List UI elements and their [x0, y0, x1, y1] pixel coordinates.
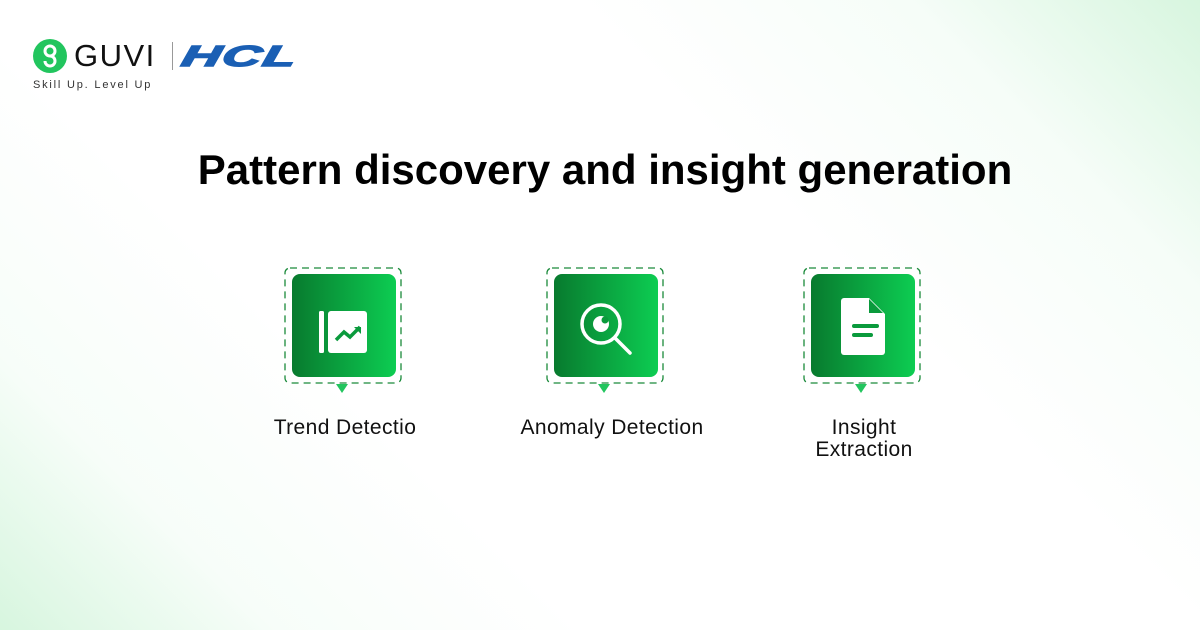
label: anomaly: Anomaly Detection — [520, 416, 704, 439]
label: insight — [815, 416, 913, 461]
card: anomaly detection — [546, 267, 664, 393]
title: Pattern discovery and insight generation — [198, 146, 1012, 193]
card: trend detection — [284, 267, 402, 393]
tagline: Skill Up. Level Up — [33, 79, 152, 91]
card: insight extraction — [803, 267, 921, 393]
icon: guvi — [33, 39, 67, 73]
hcl wordmark: HCL — [179, 41, 301, 73]
guvi wordmark: GUVI — [74, 38, 156, 73]
label: trend: Trend Detectio — [274, 416, 416, 439]
label: insight: Insight — [832, 416, 896, 439]
logo — [33, 38, 301, 91]
label: insight: Extraction — [815, 438, 913, 461]
